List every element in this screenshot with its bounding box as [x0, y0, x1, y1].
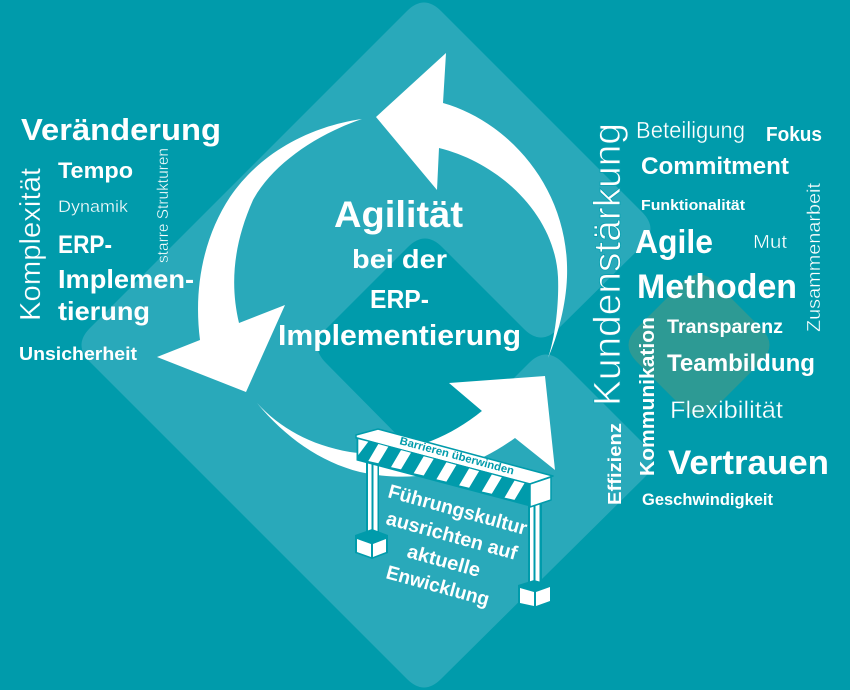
subtitle: ERP-: ERP-: [370, 284, 429, 314]
barrier text block: [384, 481, 530, 611]
title: Agilität: Agilität: [334, 194, 463, 235]
barrier: left foot: [355, 529, 388, 559]
cycle arrows: [157, 53, 567, 477]
line: Führungskultur: Führungskultur: [386, 481, 530, 540]
word: Geschwindigkeit: Geschwindigkeit: [642, 491, 773, 509]
word: Kundenstärkung: Kundenstärkung: [587, 123, 629, 406]
word: Methoden: Methoden: [637, 268, 797, 306]
barrier: crossbar end face: [530, 477, 551, 507]
word: Unsicherheit: Unsicherheit: [19, 343, 137, 364]
word: Tempo: Tempo: [58, 158, 133, 183]
word: Zusammenarbeit: Zusammenarbeit: [803, 183, 824, 332]
arrow: top, pointing up-left: [376, 53, 567, 358]
word: Implemen-: Implemen-: [58, 264, 194, 294]
barrier: right foot: [518, 580, 552, 608]
panel: green accent diamond: [628, 274, 770, 416]
word: Commitment: Commitment: [641, 153, 789, 180]
word: Vertrauen: Vertrauen: [668, 444, 829, 482]
arrow: bottom, pointing up-right: [257, 376, 555, 477]
barrier: right post: [528, 500, 542, 584]
word: Fokus: Fokus: [766, 124, 822, 146]
barrier: crossbar top face: [356, 429, 553, 484]
arrow: left, pointing down: [157, 119, 362, 392]
word: Funktionalität: Funktionalität: [641, 197, 745, 214]
word: Beteiligung: Beteiligung: [636, 117, 745, 143]
barrier: [355, 429, 553, 608]
line: Enwicklung: Enwicklung: [384, 562, 492, 611]
word: Agile: Agile: [635, 223, 713, 260]
word: Dynamik: Dynamik: [58, 197, 129, 216]
barrier: hazard stripes: [358, 439, 524, 500]
word: Flexibilität: Flexibilität: [670, 397, 783, 424]
word: Kommunikation: Kommunikation: [637, 317, 659, 476]
word: starre Strukturen: starre Strukturen: [155, 148, 172, 263]
subtitle: Implementierung: Implementierung: [278, 320, 521, 352]
barrier: left post: [366, 460, 379, 536]
word: tierung: tierung: [58, 296, 150, 326]
word: Teambildung: Teambildung: [667, 350, 815, 377]
line: ausrichten auf: ausrichten auf: [384, 508, 520, 565]
word: Komplexität: Komplexität: [15, 168, 47, 321]
word: Effizienz: Effizienz: [605, 423, 625, 505]
panel: light rounded diamond with inner cut-out: [82, 2, 652, 688]
word cloud: right: [587, 117, 829, 509]
line: aktuelle: aktuelle: [405, 541, 483, 582]
center title: [278, 194, 521, 352]
word cloud: left: [15, 112, 221, 364]
word: Transparenz: Transparenz: [667, 316, 783, 338]
barrier: crossbar front face: [356, 437, 530, 506]
word: Veränderung: Veränderung: [21, 112, 221, 147]
word: Mut: Mut: [753, 232, 787, 252]
word: ERP-: ERP-: [58, 231, 112, 259]
subtitle: bei der: bei der: [352, 244, 447, 274]
barrier label: Barrieren überwinden: [398, 435, 516, 478]
